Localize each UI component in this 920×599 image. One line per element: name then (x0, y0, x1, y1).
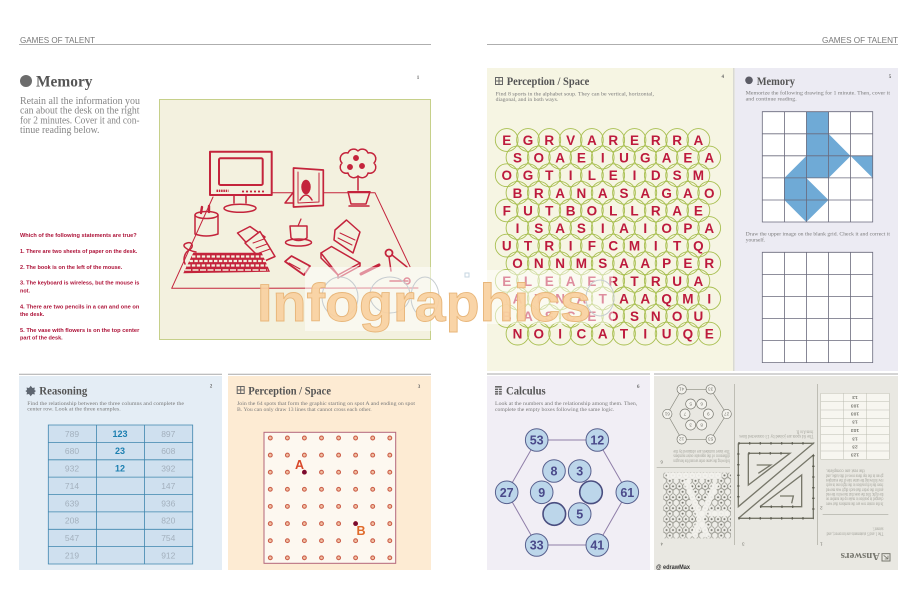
answer 6 hexagon: 33 (708, 387, 713, 392)
number table (48, 425, 193, 564)
answer 2 table: 13 (852, 394, 858, 400)
instructions (237, 400, 415, 413)
instructions: Memorize the following drawing for 1 minute. Then, cover it (746, 90, 890, 96)
panel: perception word soup (487, 68, 733, 371)
watermark overlay haze (305, 267, 614, 331)
intro paragraph: can about the desk on the right (20, 106, 140, 117)
number table: 912 (161, 550, 176, 560)
panel: memory drawing (733, 68, 898, 371)
answer 2 text: changed in position to make up the number on (826, 496, 883, 502)
question list: not. (20, 288, 30, 294)
answer 1 (820, 525, 883, 547)
number table: 680 (65, 446, 79, 456)
answer 6 hexagon: 6 (700, 401, 703, 406)
letter grid: BRANASAGAO (513, 186, 714, 201)
page number 3: 3 (418, 385, 421, 390)
answer 6 hexagon: 53 (708, 437, 713, 442)
answer 2 table: 103 (851, 402, 859, 408)
dot grid (264, 432, 396, 563)
intro paragraph: Retain all the information you (20, 96, 140, 107)
answer 1: The 1 and 5 statements are incorrect, and (826, 531, 883, 537)
number hexagon: 27 (500, 486, 514, 500)
letter grid: ONNMSAAPER (512, 256, 714, 271)
answer 6 hexagon (660, 385, 731, 465)
instructions: Join the 64 spots that form the graphic starting on spot A and ending on spot (237, 400, 415, 407)
number hexagon (495, 429, 639, 556)
letter grid: BASCEOSNOU (502, 309, 703, 324)
instructions: center row. Look at the three examples. (27, 407, 121, 413)
letter grid: FUTBOLLRAE (503, 203, 703, 218)
letter grid: EGRVARERRA (502, 133, 704, 148)
desk outline (172, 193, 418, 288)
panel: calculus (487, 376, 650, 570)
number table: 932 (65, 464, 79, 474)
answer 6 hexagon: 5 (689, 401, 692, 406)
number table: 23 (115, 446, 125, 456)
header: left page: GAMES OF TALENT (20, 35, 95, 45)
number hexagon: 53 (530, 434, 544, 448)
page number 1: 1 (417, 76, 420, 81)
number hexagon: 8 (551, 465, 558, 479)
answer 1: statement 5. (873, 525, 883, 531)
page number 2: 2 (210, 384, 213, 390)
answer 2 text: In the center row are the numbers that were (826, 500, 883, 506)
number table: 547 (65, 533, 79, 543)
letter grid: ISASIAIOPA (516, 221, 714, 236)
icon: cable loop (184, 243, 196, 264)
icon: keyboard (183, 253, 270, 273)
instructions: B. You can only draw 13 lines that cannot cross each other. (237, 407, 372, 413)
page number 4: 4 (721, 75, 724, 80)
icon: pencil can (195, 206, 218, 236)
instructions: and continue reading. (746, 97, 797, 103)
answer 2 text: row following the same rule of the examples (826, 477, 883, 484)
icon: keys (386, 250, 410, 284)
question list: the desk. (20, 312, 45, 318)
second instructions: yourself. (746, 236, 766, 243)
instructions: diagonal, and in both ways. (496, 97, 559, 103)
icon: flower vase (340, 149, 376, 206)
answer 6 hexagon: 12 (679, 437, 684, 442)
answer 2 text: given in the top three rows of this table, and (826, 472, 883, 479)
answer 6 hexagon: difference of the opposite outer numbers (673, 453, 730, 460)
page number 6: 6 (637, 385, 640, 390)
number hexagon: 12 (590, 434, 604, 448)
heading: memory: Memory (757, 76, 795, 88)
page number 5: 5 (889, 75, 892, 80)
answer 6 hexagon: 3 (689, 422, 692, 427)
number hexagon: 61 (620, 486, 634, 500)
icon: memory dot (20, 75, 32, 87)
instructions: Find 8 sports in the alphabet soup. They can be vertical, horizontal, (496, 92, 655, 98)
panel: desk illustration (160, 100, 430, 340)
answer 6 hexagon: The inner numbers are obtained by the (673, 448, 730, 454)
watermark: edrawMax credit: @ edrawMax (656, 564, 690, 571)
number table: 208 (65, 516, 79, 526)
answer 2 table: 13 (852, 435, 858, 441)
spot B marker: B (356, 524, 366, 538)
number hexagon: 33 (530, 539, 544, 553)
icon: sheets of paper (238, 226, 275, 262)
number table: 897 (161, 429, 176, 439)
intro paragraph: for 2 minutes. Cover it and con- (20, 115, 140, 126)
number hexagon: 9 (538, 486, 545, 500)
heading: reasoning: Reasoning (39, 385, 88, 397)
letter grid: UTRIFCMITQ (502, 239, 704, 254)
number table: 936 (161, 498, 176, 508)
number hexagon: 3 (576, 465, 583, 479)
icon: coffee cup (286, 219, 312, 246)
instructions: Look at the numbers and the relationship among them. Then, (495, 401, 638, 407)
answer 6 hexagon: 8 (700, 422, 703, 427)
question list: 3. The keyboard is wireless, but the mouse is (20, 280, 139, 286)
icon: pencil (361, 265, 379, 274)
number table: 714 (65, 481, 79, 491)
answer 6 hexagon: 41 (679, 387, 684, 392)
answer 1: 1 (820, 542, 823, 547)
heading: perception / space: Perception / Space (507, 76, 589, 88)
answer 3 spiral: from A to B. (796, 428, 813, 435)
answer 2 text: the right; first the ones that moved to the end (826, 491, 883, 498)
number table: 123 (112, 429, 128, 439)
answer 4 word soup (660, 473, 731, 547)
instructions (495, 401, 638, 413)
answer 2 table: 13 (852, 419, 858, 425)
second instructions (746, 232, 890, 243)
panel: perception dots (228, 376, 431, 570)
question list: part of the desk. (20, 336, 63, 342)
number table: 639 (65, 498, 79, 508)
number table: 789 (65, 429, 79, 439)
question list: 2. The book is on the left of the mouse. (20, 265, 123, 271)
heading: perception / space: Perception / Space (248, 385, 331, 397)
answer 2 text: the rest are complete. (826, 468, 865, 474)
icon: grid square (237, 386, 245, 394)
letter grid: SOAEIUGAEA (513, 150, 714, 166)
letter grid: ELEAERTRUA (502, 274, 704, 289)
header: right page: GAMES OF TALENT (822, 35, 898, 45)
answer 6 hexagon: 7 (683, 411, 686, 416)
answer 2 table (821, 393, 889, 459)
letter grid: OGTILEIDSM (501, 168, 704, 183)
answer 2 text (820, 468, 883, 511)
answer 6 hexagon: 6 (660, 460, 663, 465)
intro paragraph (20, 96, 140, 136)
intro paragraph: tinue reading below. (20, 125, 100, 136)
answer 2 table: 103 (851, 427, 859, 433)
number table: 12 (115, 464, 125, 474)
question list: 5. The vase with flowers is on the top center (20, 328, 140, 334)
number table: 608 (161, 446, 176, 456)
answer dividers (657, 384, 888, 545)
instructions (746, 90, 890, 103)
letter grid (501, 133, 714, 342)
icon: memory dot (745, 76, 753, 84)
icon: diamond cluster (25, 386, 36, 396)
answer 6 hexagon: following the same order around the hexagon (673, 457, 730, 464)
answer 2 table: 23 (852, 444, 858, 450)
panel: memory intro (20, 74, 420, 136)
icon: computer monitor (210, 152, 272, 212)
number hexagon: 41 (590, 539, 604, 553)
number table: 392 (161, 464, 176, 474)
icon: paper stack (334, 220, 360, 253)
answer 3 spiral (738, 428, 813, 547)
instructions: complete the empty boxes following the same logic. (495, 406, 615, 413)
question list: 4. There are two pencils in a can and one on (20, 304, 140, 310)
spot A marker: A (295, 458, 304, 472)
answer 6 hexagon: 9 (707, 411, 710, 416)
icon: book (321, 246, 360, 278)
dividers (19, 373, 898, 375)
answer 2 table: 123 (851, 452, 859, 458)
heading: calculus: Calculus (506, 385, 546, 397)
number table: 754 (161, 533, 176, 543)
question list: 1. There are two sheets of paper on the desk. (20, 249, 138, 255)
answer 2 text: from the left position to the right one in each (826, 482, 883, 489)
letter grid: NOICATIUQE (513, 327, 714, 342)
second instructions: Draw the upper image on the blank grid. Check it and correct it (746, 232, 890, 238)
icon: calculator (495, 386, 502, 395)
answer 2 table: 103 (851, 411, 859, 417)
instructions (496, 92, 655, 103)
watermark: Infographics: Infographics (257, 274, 591, 333)
icon: grid square (495, 77, 503, 85)
panel: reasoning (19, 376, 222, 570)
heading: memory: Memory (36, 74, 92, 90)
instructions: Find the relationship between the three columns and complete the (27, 401, 185, 407)
number hexagon: 5 (576, 508, 583, 522)
answer 2 text: 2 (820, 506, 823, 511)
number table: 820 (161, 516, 176, 526)
answer 6 hexagon: 27 (724, 411, 729, 416)
heading: answers: Answers (841, 550, 880, 561)
question list: Which of the following statements are true? (20, 233, 137, 239)
answer 2 text: and in the order that each digit was moved (826, 486, 883, 492)
number table: 147 (161, 481, 176, 491)
instructions (27, 401, 185, 413)
letter circles (495, 129, 721, 345)
answer 3 spiral: 3 (742, 542, 745, 547)
letter grid: ATNATAAQMI (513, 291, 711, 306)
panel: answers (upside down) (654, 376, 898, 570)
blank grid (762, 252, 873, 363)
number table: 219 (65, 550, 79, 560)
answer 4 word soup: 4 (660, 542, 663, 547)
answer 3 spiral: The 64 spots are joined by 13 connected lines (739, 433, 813, 439)
question list (20, 233, 140, 342)
grid with blue shape (762, 112, 873, 222)
icon: mouse (285, 256, 310, 275)
icon: picture frame (285, 168, 323, 207)
answer 6 hexagon: 61 (664, 411, 670, 416)
